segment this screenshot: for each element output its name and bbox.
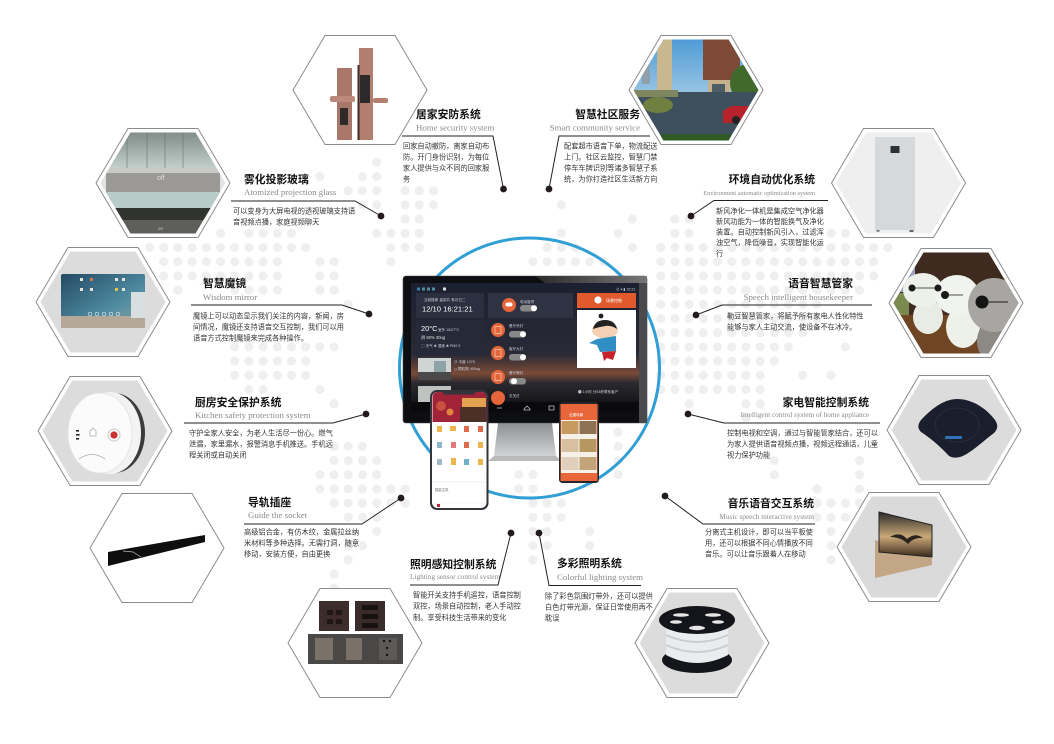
panel: home appliance control [685, 376, 1021, 484]
subtitle: Wisdom mirror [203, 292, 257, 302]
connector line with dot [536, 530, 641, 586]
heading: 厨房安全保护系统 [195, 395, 282, 409]
heading: 智慧社区服务 [575, 107, 640, 121]
dashboard screen: 室外 15/27°C [438, 327, 460, 332]
description: 为家人提供语音视频点播，视频远程通话，儿童 [727, 440, 878, 448]
connector line with dot [410, 530, 514, 585]
dashboard screen: 当前楼家 量前共 有月日二 [424, 297, 466, 302]
description: 用，还可以根据不同心情播放不同 [705, 538, 813, 548]
panel: home security system [293, 36, 507, 192]
hexagon photo: white robots [889, 248, 1025, 366]
description: 分离式主机设计，即可以当平板使 [705, 528, 813, 536]
description: 高级铝合金，有仿木纹，金属拉丝纳 [244, 528, 359, 536]
left phone app [430, 390, 488, 510]
panel: smart community service [546, 36, 763, 192]
connector line with dot [402, 136, 507, 192]
dashboard screen: ❶ 1小时 分53秒联系客户 [578, 389, 619, 394]
description: 新风功能为一体的智能换气及净化 [716, 217, 824, 226]
description: 白色灯带光源，保证日常使用再不 [545, 602, 653, 612]
description: 停车车牌识别等诸多智慧子系 [564, 164, 657, 172]
description: 双控，场景自动控制，老人手动控 [413, 602, 521, 610]
dashboard screen: ◻ 颗粒物 400ug [454, 366, 480, 371]
description: 勒豆智慧管家，将赋予所有家电人性化特性 [727, 312, 864, 320]
connector line with dot [244, 495, 404, 524]
description: 配套超市语音下单，物流配送 [564, 142, 657, 150]
panel: guide the socket [90, 494, 404, 602]
subtitle: Lighting sensor control system [410, 572, 501, 581]
description [189, 428, 333, 460]
dashboard screen: 餐厅吊灯 [509, 323, 524, 328]
right phone app: 全屋场景 [569, 412, 584, 417]
dashboard screen: 20°C [421, 324, 438, 333]
hexagon photo: wall switches [288, 588, 422, 698]
dashboard screen: ◯ 天气 ✱ 湿度 ✱ PM2.5 [421, 343, 460, 348]
dashboard screen: ⊘ 中度 1275 [454, 359, 475, 364]
panel: kitchen safety [38, 376, 369, 486]
hexagon photo: rail socket [90, 494, 224, 602]
hexagon photo: residential community [629, 36, 763, 144]
hexagon photo: smart door lock [293, 36, 427, 144]
description: 回家自动撤防，离家自动布 [403, 142, 489, 150]
panel: music voice interaction [662, 492, 971, 602]
connector line with dot [231, 201, 384, 219]
connector line with dot [184, 411, 369, 423]
connector line with dot [685, 411, 880, 423]
description [193, 312, 344, 342]
panel: environment optimization system [688, 128, 966, 258]
panel: speech housekeeper [693, 248, 1025, 366]
dotted world map background [150, 162, 902, 603]
heading: 雾化投影玻璃 [244, 172, 309, 186]
description: 音乐。可以让音乐跟着人在移动 [705, 550, 806, 558]
heading: 照明感知控制系统 [410, 557, 497, 571]
subtitle: Smart community service [550, 122, 640, 132]
subtitle: Intelligent control system of home appliance [741, 411, 869, 419]
panel: lighting sensor control [288, 530, 521, 698]
heading: 环境自动优化系统 [729, 172, 815, 186]
panel: colorful lighting [536, 530, 769, 698]
description: 程关闭或自动关闭 [189, 450, 247, 460]
subtitle: Guide the socket [248, 510, 308, 520]
hexagon photo: smart glass room: on [158, 226, 163, 231]
description [716, 206, 824, 258]
hexagon photo: smart glass room: off [157, 175, 165, 182]
panel: wisdom mirror [36, 248, 372, 356]
heading: 家电智能控制系统 [783, 395, 869, 409]
description: 新风净化一体机是集成空气净化器 [716, 206, 824, 216]
description: 除了彩色氛围灯带外，还可以提供 [545, 592, 653, 600]
right phone app [559, 402, 599, 483]
hexagon photo: smoke detector [38, 376, 172, 486]
subtitle: Kitchen safety protection system [195, 410, 311, 420]
subtitle: Atomized projection glass [244, 187, 337, 197]
heading: 语音智慧管家 [788, 276, 853, 290]
subtitle: Environment automatic optimization system [703, 190, 815, 197]
dashboard screen: 阴 60% 30ug [421, 334, 446, 341]
description: 间情况，魔镜还支持语音交互控制，我们可以用 [193, 322, 344, 332]
description [413, 590, 521, 622]
heading: 多彩照明系统 [557, 556, 622, 570]
monitor nav icons [497, 406, 554, 410]
connector line with dot [688, 200, 828, 219]
hexagon photo: black control hub [887, 376, 1021, 484]
description [233, 206, 355, 226]
left phone app: 智能主机 [435, 487, 449, 492]
description: 能够与家人主动交流，使设备不在冰冷。 [727, 322, 856, 332]
description: 行 [716, 249, 723, 258]
dashboard screen [411, 283, 639, 412]
subtitle: Speech intelligent housekeeper [744, 292, 853, 302]
dashboard screen: ⊘ ▾ ▮ 15:21 [616, 288, 635, 292]
dashboard screen: 12/10 16:21:21 [422, 304, 473, 314]
dashboard screen: 客厅大灯 [509, 346, 524, 351]
heading: 居家安防系统 [416, 107, 481, 121]
dashboard screen: 场景控制 [606, 297, 622, 303]
blue circle behind monitor [400, 238, 660, 498]
dashboard screen: 餐厅筒灯 [509, 370, 524, 375]
description [244, 528, 359, 558]
description: 可以变身为大屏电视的透视玻璃支持语 [233, 206, 355, 216]
hexagon photo: fresh air unit [832, 128, 966, 238]
description: 智能开关支持手机遥控，语音控制 [413, 590, 521, 600]
connector line with dot [662, 493, 815, 524]
panel: atomized projection glass [96, 128, 384, 238]
description [705, 528, 813, 558]
description: 装置。自动控制新风引入，过滤浑 [716, 228, 824, 236]
hexagon photo: smart glass room [96, 128, 230, 238]
description: 语音方式控制魔镜来完成各种操作。 [193, 334, 308, 342]
hexagon photo: wall screen [837, 492, 971, 602]
dashboard screen: 电动窗帘 [520, 299, 535, 304]
app icon grid [437, 426, 483, 465]
description: 音视频点播，家庭视频聊天 [233, 218, 319, 226]
connector line with dot [191, 305, 372, 317]
description: 耽误 [545, 614, 559, 622]
heading: 智慧魔镜 [203, 276, 246, 290]
subtitle: Home security system [416, 122, 494, 132]
description: 防。开门身份识别，为每位 [403, 152, 489, 162]
description: 守护全家人安全，为老人生活尽一份心。燃气 [189, 428, 333, 438]
description [403, 142, 489, 184]
hexagon photo: smart mirror [36, 248, 170, 356]
app banner [432, 392, 486, 422]
connector line with dot [693, 305, 872, 318]
connector line with dot [546, 136, 650, 192]
subtitle: Music speech interactive system [719, 512, 814, 521]
hexagon photo: LED strip reel [635, 588, 769, 698]
subtitle: Colorful lighting system [557, 572, 643, 582]
heading: 音乐语音交互系统 [728, 496, 814, 510]
description: 上门。社区云监控，智慧门禁 [564, 152, 657, 162]
description: 魔镜上可以动态显示我们关注的内容，新闻，房 [193, 312, 344, 320]
description [545, 592, 653, 622]
description: 浊空气，降低噪音，实现智能化运 [716, 238, 824, 247]
description: 务 [403, 174, 410, 184]
heading: 导轨插座 [248, 495, 291, 509]
dashboard screen: 玄关灯 [509, 393, 520, 398]
description: 控制电视和空调，通过与智能管家结合，还可以 [727, 428, 878, 438]
central monitor with smart home dashboard [403, 276, 647, 461]
description: 米材料等多种选择。无需打洞，随意 [244, 538, 359, 548]
description: 统，为你打造社区生活新方向 [564, 174, 657, 184]
description [727, 428, 878, 460]
description [564, 142, 657, 184]
cartoon mascot [589, 314, 618, 361]
description: 制。享受科技生活带来的变化 [413, 613, 506, 622]
monitor body [403, 276, 647, 423]
description: 泄漏，家里漏水，报警消息手机推送。手机远 [189, 440, 333, 448]
description [727, 312, 864, 332]
description: 家人提供与众不同的回家服 [403, 164, 489, 172]
description: 移动，安装方便，自由更换 [244, 550, 330, 558]
monitor stand [488, 423, 562, 461]
description: 视力保护功能 [727, 450, 770, 460]
